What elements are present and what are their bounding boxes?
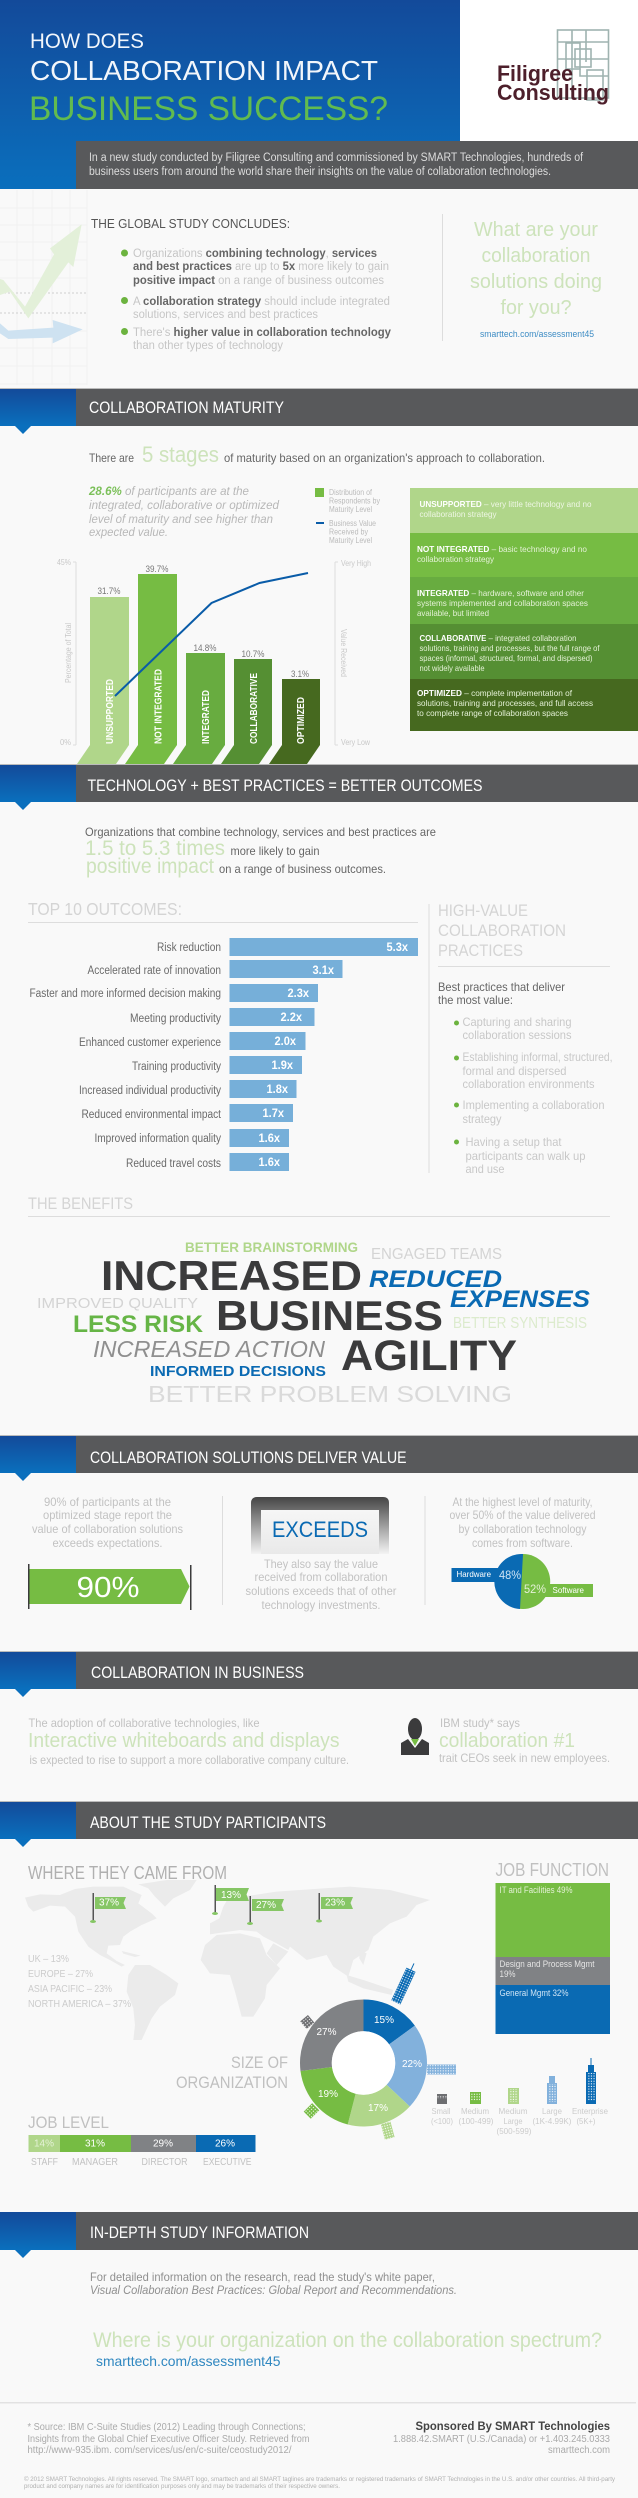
word cloud: benefits: BETTER PROBLEM SOLVING <box>148 1381 512 1407</box>
stage: integrated: INTEGRATED – hardware, software and other <box>417 588 584 598</box>
section header: collaboration solutions deliver value <box>0 1435 638 1481</box>
sponsor block <box>393 2419 610 2456</box>
panel: job function: General Mgmt 32% <box>500 1988 568 1998</box>
technology investments text: They also say the value <box>264 1557 378 1571</box>
interactive whiteboards text: is expected to rise to support a more collaborative company culture. <box>30 1753 349 1767</box>
best practices list: Implementing a collaboration <box>462 1098 604 1112</box>
source footnote: http://www-935.ibm. com/services/us/en/c-suite/ceostudy2012/ <box>28 2445 292 2456</box>
pie chart: hardware vs software: 52% <box>524 1582 546 1596</box>
best practices list: Establishing informal, structured, <box>462 1050 612 1064</box>
copyright <box>24 2475 616 2490</box>
title: COLLABORATION IMPACT <box>30 55 378 86</box>
donut values: 27% <box>316 2027 337 2038</box>
chart axes: Percentage of Total <box>64 623 73 683</box>
panel: job function <box>496 1860 610 2034</box>
job level labels: DIRECTOR <box>142 2157 188 2168</box>
chart axes <box>57 558 371 747</box>
chart axes: Very Low <box>341 738 370 747</box>
region list: UK – 13% <box>28 1954 69 1965</box>
job level labels: EXECUTIVE <box>203 2157 252 2168</box>
legend labels: (100-499) <box>458 2116 494 2126</box>
flag: uk 13% <box>212 1885 249 1915</box>
logo: Filigree Consulting: Filigree <box>497 61 573 86</box>
bar chart: top 10 outcomes <box>30 938 418 1171</box>
best practices intro <box>438 980 565 1007</box>
5 stages statement <box>89 442 545 467</box>
call to action: what are your collaboration solutions doing: solutions doing <box>470 271 602 293</box>
bar names: NOT INTEGRATED <box>154 669 164 744</box>
source footnote <box>28 2422 310 2456</box>
chart legend: Respondents by <box>329 496 380 506</box>
bullet list: solutions, services and best practices <box>133 309 318 321</box>
bullet list: than other types of technology <box>133 340 283 352</box>
stage: integrated <box>410 577 638 624</box>
flag: asia pacific 23%: 23% <box>325 1898 345 1908</box>
better outcomes statement: 1.5 to 5.3 times <box>85 837 225 860</box>
bar values: 31.7% <box>98 586 120 596</box>
panel: job level: JOB LEVEL <box>28 2113 109 2132</box>
IBM study text: trait CEOs seek in new employees. <box>439 1751 610 1765</box>
region list: ASIA PACIFIC – 23% <box>28 1984 112 1995</box>
software text: comes from software. <box>472 1536 573 1550</box>
best practices list <box>454 1015 612 1176</box>
expectations text: value of collaboration solutions <box>32 1522 183 1536</box>
call to action: what are your collaboration solutions doing: What are your <box>474 219 598 241</box>
pie chart: hardware vs software <box>452 1554 593 1609</box>
section header: technology + best practices: TECHNOLOGY + BEST PRACTICES = BETTER OUTCOMES <box>88 776 482 795</box>
bar values: 14.8% <box>194 643 216 653</box>
section header: about the study participants: ABOUT THE STUDY PARTICIPANTS <box>90 1813 326 1832</box>
chart legend: Business Value <box>329 519 376 528</box>
section header: collaboration in business: COLLABORATION IN BUSINESS <box>91 1663 304 1682</box>
technology investments text <box>246 1557 396 1612</box>
building size legend <box>431 2058 608 2136</box>
expectations text: exceeds expectations. <box>52 1536 162 1550</box>
word cloud: benefits: EXPENSES <box>450 1286 590 1313</box>
icon: enterprise tower <box>391 1961 419 2005</box>
flag: uk 13%: 13% <box>221 1890 241 1901</box>
bullet list <box>121 248 392 352</box>
stage: unsupported: UNSUPPORTED – very little technology and no <box>420 499 592 509</box>
bar names <box>105 669 307 744</box>
best practices list: strategy <box>462 1112 502 1126</box>
header panel <box>0 0 638 189</box>
background chart decoration <box>0 190 87 385</box>
heading: high-value collaboration practices: COLLABORATION <box>438 921 566 940</box>
stage: collaborative: spaces (informal, structured, formal, and dispersed) <box>420 653 593 663</box>
expectations text: 90% of participants at the <box>44 1495 171 1509</box>
icon: medium-large building <box>381 2122 395 2140</box>
stage: collaborative: solutions, training and processes, but the full range of <box>420 643 600 653</box>
bar values: 3.1% <box>291 669 309 679</box>
donut values: 15% <box>374 2015 394 2026</box>
section header: collaboration maturity <box>0 388 638 434</box>
bullet list: and best practices are up to 5x more likely to gain <box>133 261 389 273</box>
chart axes: Value Received <box>339 629 348 677</box>
world map <box>25 1880 430 2040</box>
intro band: business users from around the world share their insights on the value of collaboration technologies. <box>89 166 551 178</box>
call to action: spectrum: Where is your organization on the collaboration spectrum? <box>93 2329 602 2352</box>
job level stacked bar: 26% <box>215 2138 235 2150</box>
bar names: INTEGRATED <box>201 690 212 744</box>
outcome names: Accelerated rate of innovation <box>88 965 221 977</box>
call to action: what are your collaboration solutions doing: for you? <box>500 297 572 319</box>
bar names: UNSUPPORTED <box>105 679 116 744</box>
business value line <box>115 573 308 696</box>
bullet list: Organizations combining technology, services <box>133 248 377 260</box>
outcome values: 2.2x <box>280 1010 302 1024</box>
section header: technology + best practices <box>0 764 638 810</box>
panel: job function: JOB FUNCTION <box>496 1860 609 1880</box>
chart legend: Received by <box>329 528 368 536</box>
participants statement: 28.6% of participants are at the <box>88 484 249 498</box>
bar values: 10.7% <box>242 649 264 659</box>
call to action: what are your collaboration solutions doing: smarttech.com/assessment45 <box>480 329 594 340</box>
title <box>29 30 388 128</box>
pie chart: hardware vs software: 48% <box>499 1568 521 1582</box>
better outcomes statement: on a range of business outcomes. <box>219 862 386 876</box>
job level stacked bar: 14% <box>34 2138 54 2150</box>
call to action: what are your collaboration solutions doing <box>442 214 602 341</box>
call to action: spectrum: smarttech.com/assessment45 <box>96 2353 281 2369</box>
heading: the global study concludes: THE GLOBAL STUDY CONCLUDES: <box>91 217 290 231</box>
panel: job function: Design and Process Mgmt <box>500 1959 595 1969</box>
chart axes: 0% <box>60 738 71 747</box>
chart legend: Distribution of <box>329 488 373 497</box>
bar chart: maturity distribution <box>57 558 371 764</box>
copyright: product and company names are for identification purposes only and may be trademarks of their respective owners. <box>24 2483 340 2490</box>
heading: size of organization: ORGANIZATION <box>176 2073 288 2092</box>
90 percent arrow <box>28 1564 192 1610</box>
donut values: 22% <box>402 2059 422 2070</box>
copyright: © 2012 SMART Technologies. All rights reserved. The SMART logo, smarttech and all SMART taglines are trademarks or registered trademarks of SMART Technologies in the U.S. and/or other countries. All third-party <box>24 2475 616 2483</box>
source footnote: Insights from the Global Chief Executive Officer Study. Retrieved from <box>28 2434 310 2445</box>
icon: business person <box>401 1718 429 1755</box>
90 percent arrow: 90% <box>76 1572 140 1604</box>
donut values <box>316 2015 422 2114</box>
sponsor block: 1.888.42.SMART (U.S./Canada) or +1.403.245.0333 <box>393 2434 610 2445</box>
bar names: OPTIMIZED <box>296 697 307 744</box>
word cloud: benefits: INCREASED <box>101 1252 362 1299</box>
participants statement <box>88 484 279 539</box>
IBM study text: IBM study* says <box>440 1716 520 1730</box>
best practices list: collaboration sessions <box>462 1028 572 1042</box>
best practices list: Having a setup that <box>466 1135 562 1149</box>
sponsor block: Sponsored By SMART Technologies <box>416 2419 610 2433</box>
bar values: 39.7% <box>146 564 168 574</box>
chart legend: Maturity Level <box>329 536 372 545</box>
sponsor block: smarttech.com <box>548 2445 610 2456</box>
5 stages statement: There are <box>89 451 134 465</box>
outcome values: 5.3x <box>386 940 408 954</box>
stage: collaborative: not widely available <box>420 663 485 673</box>
job level stacked bar <box>28 2135 256 2152</box>
icon: monitor: EXCEEDS <box>272 1517 368 1542</box>
chart axes: 45% <box>57 558 71 567</box>
word cloud: benefits: AGILITY <box>341 1332 517 1380</box>
better outcomes statement <box>85 825 436 878</box>
word cloud: benefits: BUSINESS <box>216 1292 443 1339</box>
outcome names: Improved information quality <box>94 1133 221 1145</box>
section header: in-depth study information: IN-DEPTH STUDY INFORMATION <box>90 2223 309 2242</box>
white paper text <box>90 2270 457 2297</box>
best practices intro: the most value: <box>438 993 513 1007</box>
legend labels: Large <box>504 2116 523 2126</box>
chart legend <box>315 488 380 545</box>
stage: unsupported <box>410 488 638 533</box>
flag: europe 27% <box>247 1896 284 1925</box>
intro band <box>76 141 638 189</box>
bar values <box>98 564 309 679</box>
software text: At the highest level of maturity, <box>452 1495 592 1509</box>
outcome values: 1.6x <box>258 1131 280 1145</box>
outcome values: 1.7x <box>262 1106 284 1120</box>
white paper text: Visual Collaboration Best Practices: Global Report and Recommendations. <box>90 2283 457 2297</box>
outcome names: Increased individual productivity <box>79 1085 221 1097</box>
legend labels <box>431 2106 608 2136</box>
donut values: 17% <box>368 2103 388 2114</box>
best practices list: formal and dispersed <box>462 1064 566 1078</box>
participants statement: level of maturity and see higher than <box>89 512 273 526</box>
job level stacked bar: 29% <box>153 2138 173 2150</box>
white paper text: For detailed information on the research, read the study's white paper, <box>90 2270 435 2284</box>
outcome names: Meeting productivity <box>130 1013 221 1025</box>
section header: collaboration solutions deliver value: COLLABORATION SOLUTIONS DELIVER VALUE <box>90 1448 406 1467</box>
outcome names: Training productivity <box>132 1061 221 1073</box>
bars <box>77 574 320 764</box>
flag: asia pacific 23% <box>316 1893 353 1922</box>
word cloud: benefits: ENGAGED TEAMS <box>371 1246 502 1263</box>
legend icons <box>437 2058 596 2104</box>
stage: not integrated <box>410 533 638 577</box>
legend labels: (<100) <box>431 2116 453 2126</box>
technology investments text: technology investments. <box>262 1598 380 1612</box>
panel: job level <box>28 2113 256 2168</box>
stage: not integrated: collaboration strategy <box>417 554 495 564</box>
flag: north america 37% <box>90 1893 126 1923</box>
region list: EUROPE – 27% <box>28 1969 93 1980</box>
stage: optimized <box>410 679 638 731</box>
outcome bars <box>230 938 418 1171</box>
panel: software value <box>450 1495 596 1609</box>
word cloud: benefits: BETTER BRAINSTORMING <box>185 1239 358 1255</box>
word cloud: benefits: REDUCED <box>369 1266 502 1293</box>
stage: collaborative <box>410 624 638 679</box>
technology investments text: solutions exceeds that of other <box>246 1584 396 1598</box>
stage definitions panel <box>410 488 638 731</box>
stage: integrated: systems implemented and collaboration spaces <box>417 598 588 608</box>
heading: the benefits: THE BENEFITS <box>28 1194 133 1213</box>
heading: where they came from: WHERE THEY CAME FROM <box>28 1863 227 1883</box>
title: BUSINESS SUCCESS? <box>29 90 388 128</box>
bar names: COLLABORATIVE <box>249 673 260 744</box>
pie chart: hardware vs software: Hardware <box>456 1569 491 1579</box>
outcome values: 1.6x <box>258 1155 280 1169</box>
bullet list: positive impact on a range of business outcomes <box>133 275 384 287</box>
IBM study text: collaboration #1 <box>439 1730 575 1752</box>
stage: optimized: to complete range of collaboration spaces <box>417 708 568 718</box>
stage: unsupported: collaboration strategy <box>420 509 497 519</box>
software text: by collaboration technology <box>458 1522 586 1536</box>
interactive whiteboards text: The adoption of collaborative technologies, like <box>28 1716 260 1730</box>
outcome names: Reduced travel costs <box>126 1158 221 1170</box>
IBM study text <box>439 1716 610 1765</box>
participants statement: expected value. <box>89 525 168 539</box>
word cloud: benefits: LESS RISK <box>73 1311 204 1338</box>
software text <box>450 1495 596 1550</box>
bullet list: There's higher value in collaboration technology <box>133 327 392 339</box>
donut chart: size of organization <box>300 1961 456 2140</box>
intro band: In a new study conducted by Filigree Consulting and commissioned by SMART Technologies, hundreds of <box>89 152 584 164</box>
stage: not integrated: NOT INTEGRATED – basic technology and no <box>417 544 587 554</box>
donut values: 19% <box>318 2089 338 2100</box>
legend labels: Enterprise <box>572 2106 608 2116</box>
icon: large building <box>427 2064 456 2074</box>
legend labels: (1K-4.99K) <box>532 2116 572 2126</box>
word cloud: benefits: BETTER SYNTHESIS <box>453 1315 587 1332</box>
best practices intro: Best practices that deliver <box>438 980 565 994</box>
legend labels: (500-599) <box>496 2126 532 2136</box>
title: HOW DOES <box>30 30 144 53</box>
word cloud: benefits: INFORMED DECISIONS <box>150 1364 326 1380</box>
heading: high-value collaboration practices: PRACTICES <box>438 941 523 960</box>
legend labels: (5K+) <box>576 2116 596 2126</box>
panel: high-value collaboration practices <box>428 901 612 1176</box>
icon: medium building <box>304 2103 319 2119</box>
better outcomes statement: Organizations that combine technology, services and best practices are <box>85 825 436 839</box>
participants statement: integrated, collaborative or optimized <box>89 498 279 512</box>
best practices list: and use <box>466 1162 505 1176</box>
section header: in-depth study information <box>0 2212 638 2258</box>
legend labels: Large <box>542 2106 562 2116</box>
job level labels: STAFF <box>31 2157 58 2168</box>
5 stages statement: of maturity based on an organization's approach to collaboration. <box>224 451 545 465</box>
call to action: what are your collaboration solutions doing: collaboration <box>482 245 590 267</box>
outcome names <box>30 942 222 1170</box>
section header: collaboration in business <box>0 1651 638 1697</box>
outcome values: 1.9x <box>272 1058 293 1072</box>
region list <box>28 1954 131 2010</box>
word cloud: benefits <box>37 1239 590 1407</box>
stage: optimized: OPTIMIZED – complete implementation of <box>417 688 573 698</box>
5 stages statement: 5 stages <box>142 442 219 467</box>
legend labels: Medium <box>461 2106 489 2116</box>
interactive whiteboards text <box>28 1716 349 1767</box>
outcome values <box>258 940 408 1169</box>
flag: north america 37%: 37% <box>99 1898 119 1908</box>
logo: Filigree Consulting: Consulting <box>497 80 609 105</box>
best practices list: collaboration environments <box>462 1077 594 1091</box>
bullet list: A collaboration strategy should include integrated <box>133 296 390 308</box>
job level labels: MANAGER <box>72 2157 118 2168</box>
expectations text <box>32 1495 183 1550</box>
outcome names: Reduced environmental impact <box>82 1109 222 1121</box>
job level labels <box>31 2157 252 2168</box>
stage: optimized: solutions, training and processes, and full access <box>417 698 593 708</box>
panel: job function: 19% <box>500 1969 516 1979</box>
icon: small building <box>300 2015 314 2029</box>
job level stacked bar: 31% <box>85 2138 105 2150</box>
icon: monitor <box>251 1497 389 1554</box>
heading: high-value collaboration practices <box>438 901 610 967</box>
panel: 90 percent <box>28 1495 192 1610</box>
study conclusions <box>91 217 392 352</box>
outcome values: 3.1x <box>312 963 334 977</box>
panel: job function: IT and Facilities 49% <box>500 1885 572 1895</box>
chart axes: Very High <box>341 559 371 568</box>
pie chart: hardware vs software: Software <box>552 1585 584 1595</box>
heading: size of organization: SIZE OF <box>231 2053 288 2072</box>
better outcomes statement: positive impact <box>86 855 214 878</box>
software text: over 50% of the value delivered <box>450 1508 596 1522</box>
outcome values: 2.0x <box>274 1034 296 1048</box>
word cloud: benefits: INCREASED ACTION <box>93 1336 325 1362</box>
heading: high-value collaboration practices: HIGH-VALUE <box>438 901 528 920</box>
chart legend: Maturity Level <box>329 505 372 514</box>
better outcomes statement: more likely to gain <box>230 844 320 858</box>
outcome names: Risk reduction <box>157 942 221 954</box>
panel: exceeds <box>222 1496 426 1612</box>
interactive whiteboards text: Interactive whiteboards and displays <box>28 1730 340 1752</box>
heading: top 10 outcomes: TOP 10 OUTCOMES: <box>28 899 182 919</box>
section header: collaboration maturity: COLLABORATION MATURITY <box>89 398 284 417</box>
region list: NORTH AMERICA – 37% <box>28 1999 131 2010</box>
stage: collaborative: COLLABORATIVE – integrated collaboration <box>420 633 577 643</box>
call to action: spectrum <box>93 2329 602 2369</box>
heading: size of organization <box>176 2053 288 2092</box>
legend labels: Medium <box>498 2106 528 2116</box>
expectations text: optimized stage report the <box>43 1508 172 1522</box>
outcome values: 1.8x <box>266 1082 288 1096</box>
stage: integrated: available, but limited <box>417 608 489 618</box>
best practices list: participants can walk up <box>466 1149 586 1163</box>
word cloud: benefits: IMPROVED QUALITY <box>37 1295 198 1312</box>
legend labels: Small <box>432 2106 451 2116</box>
source footnote: * Source: IBM C-Suite Studies (2012) Leading through Connections; <box>28 2422 306 2433</box>
technology investments text: received from collaboration <box>254 1570 388 1584</box>
flag: europe 27%: 27% <box>256 1900 276 1911</box>
section header: about the study participants <box>0 1801 638 1847</box>
outcome names: Faster and more informed decision making <box>30 988 221 1000</box>
outcome values: 2.3x <box>288 986 309 1000</box>
best practices list: Capturing and sharing <box>462 1015 572 1029</box>
logo: Filigree Consulting <box>497 30 609 105</box>
outcome names: Enhanced customer experience <box>79 1037 221 1049</box>
